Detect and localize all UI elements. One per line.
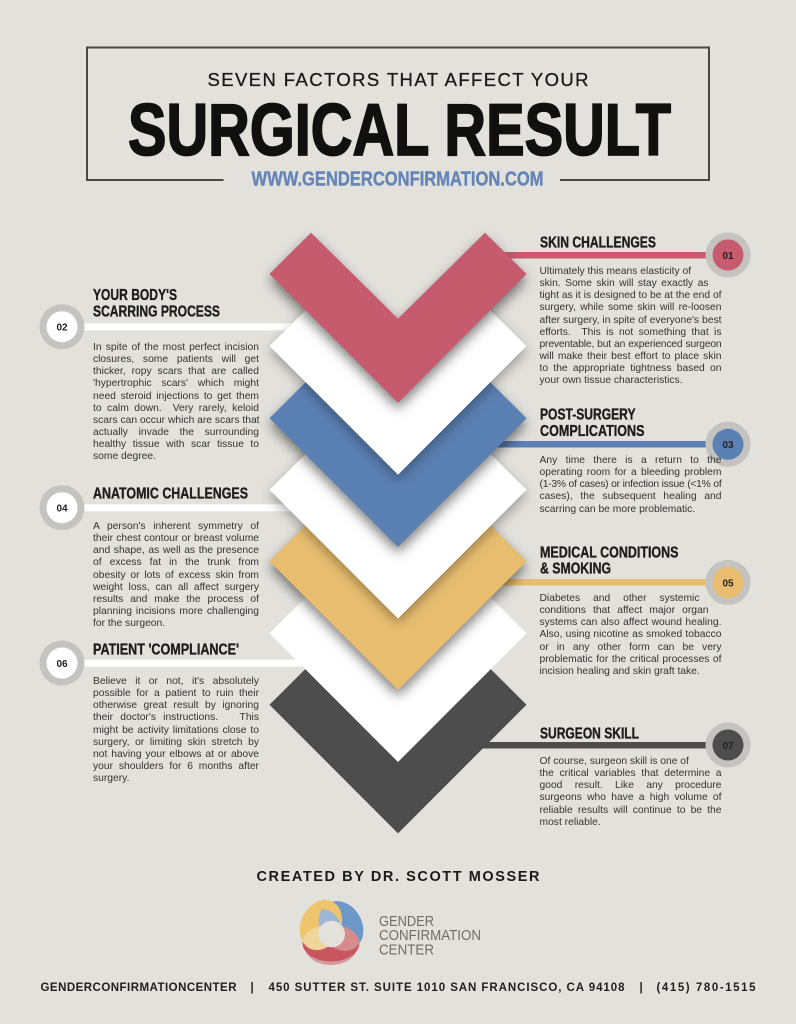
text: your body's scarring process: In spite of the most perfect incision [93, 342, 259, 353]
text: anatomic challenges: for the surgeon. [93, 618, 165, 629]
logo wordmark: GENDER [379, 913, 434, 930]
panel: 05 medical conditions and smoking [540, 544, 722, 677]
contact line: | [640, 982, 643, 994]
text: anatomic challenges: obesity or lots of excess skin from [93, 570, 259, 580]
text: anatomic challenges: of excess fat in the trunk from [93, 557, 259, 568]
logo wordmark: CONFIRMATION [379, 927, 481, 944]
title frame [87, 48, 709, 180]
text: surgeon skill: most reliable. [540, 817, 601, 828]
heading: medical conditions and smoking: MEDICAL CONDITIONS [540, 544, 678, 562]
text: skin challenges: will make their best effort to place skin [540, 351, 722, 362]
connector: 02 [62, 323, 302, 330]
heading: your body's scarring process: SCARRING PROCESS [93, 304, 220, 320]
panel: 01 skin challenges [540, 234, 722, 386]
text: patient compliance: your shoulders for 6 months after [93, 761, 259, 772]
text: patient compliance: their doctor's instructions. This [93, 712, 259, 723]
chevron: white 1 [270, 305, 526, 480]
text: patient compliance: might be activity limitations close to [93, 724, 259, 736]
text: skin challenges: surgery, while some skin will re-loosen [540, 302, 722, 313]
panel: 03 post-surgery complications [540, 406, 722, 514]
text: surgeon skill: the critical variables that determine a [540, 768, 722, 779]
text: your body's scarring process: need steroid injections to get them [93, 390, 259, 402]
contact line: 450 SUTTER ST. SUITE 1010 SAN FRANCISCO, CA 94108 [268, 982, 625, 994]
text: patient compliance: surgery. [93, 773, 129, 784]
text: anatomic challenges: results and make the process of [93, 594, 259, 605]
text: surgeon skill [540, 756, 722, 828]
badge: 06: 06 [56, 659, 68, 670]
chevron: white 2 [270, 448, 526, 624]
contact line: | [250, 982, 254, 994]
subtitle: SEVEN FACTORS THAT AFFECT YOUR [208, 69, 588, 90]
heading: anatomic challenges: ANATOMIC CHALLENGES [93, 486, 248, 502]
text: surgeon skill: good result. Like any procedure [540, 780, 722, 791]
badge: 05: 05 [722, 578, 734, 589]
badge: 02 [40, 304, 84, 349]
text: your body's scarring process: closures, some patients will get [93, 354, 259, 365]
website url: WWW.GENDERCONFIRMATION.COM [252, 168, 544, 190]
text: surgeon skill: surgeons who have a high volume of [540, 792, 722, 803]
text: medical conditions and smoking: Diabetes and other systemic [540, 593, 700, 604]
connector: 05 [495, 579, 728, 586]
logo mark [300, 900, 364, 965]
text: post-surgery complications: (1-3% of cases) or infection issue (<1% of [540, 479, 722, 490]
heading: post-surgery complications: POST-SURGERY [540, 406, 636, 424]
text: skin challenges [540, 266, 722, 386]
connector: 04 [62, 504, 302, 511]
heading: skin challenges: SKIN CHALLENGES [540, 234, 656, 252]
footer [40, 869, 756, 994]
connector: 06 [62, 660, 302, 667]
connector: 03 [495, 441, 728, 448]
header: title box [86, 46, 710, 190]
chevron: blue [270, 377, 526, 553]
text: patient compliance: Believe it or not, it's absolutely [93, 676, 259, 687]
text: anatomic challenges [93, 521, 259, 629]
chevron: yellow [270, 520, 526, 696]
heading: surgeon skill: SURGEON SKILL [540, 726, 638, 742]
text: your body's scarring process: to calm down. Very rarely, keloid [93, 403, 259, 414]
heading: post-surgery complications: COMPLICATIONS [540, 423, 644, 440]
badge: 04: 04 [56, 504, 68, 514]
panel: 06 patient compliance [93, 642, 259, 784]
main title: SURGICAL RESULT [128, 90, 671, 171]
panel: 04 anatomic challenges [93, 486, 259, 629]
text: patient compliance: possible for a patient to ruin their [93, 688, 259, 699]
chevron: white 3 [270, 592, 526, 762]
text: skin challenges: after surgery, in spite of everyone's best [540, 314, 722, 326]
text: medical conditions and smoking: problematic for the critical processes of [540, 654, 722, 665]
text: medical conditions and smoking: systems can also affect wound healing. [540, 617, 722, 628]
logo wordmark [379, 913, 481, 958]
heading: patient compliance: PATIENT 'COMPLIANCE' [93, 642, 239, 658]
text: anatomic challenges: their chest contour or breast volume [93, 533, 259, 544]
heading: medical conditions and smoking: & SMOKING [540, 561, 610, 578]
text: surgeon skill: Of course, surgeon skill is one of [540, 756, 689, 767]
text: medical conditions and smoking [540, 593, 722, 677]
heading: medical conditions and smoking [540, 544, 678, 578]
panel: 07 surgeon skill [540, 726, 722, 828]
text: skin challenges: efforts. This is not something that is [540, 327, 722, 338]
text: skin challenges: to the appropriate tightness based on [540, 363, 722, 374]
connector: 01 [495, 252, 728, 258]
text: skin challenges: preventable, but an experienced surgeon [540, 339, 722, 350]
badge: 07 [706, 722, 750, 768]
heading: post-surgery complications [540, 406, 644, 440]
panel: 02 your body's scarring process [93, 287, 260, 462]
logo wordmark: CENTER [379, 942, 434, 958]
heading: your body's scarring process: YOUR BODY'S [93, 287, 177, 304]
text: medical conditions and smoking: Also, using nicotine as smoked tobacco [540, 629, 722, 640]
text: medical conditions and smoking: conditions that affect major organ [540, 605, 708, 616]
text: skin challenges: tight as it is designed to be at the end of [540, 290, 722, 301]
badge: 01 [706, 232, 750, 278]
text: medical conditions and smoking: or in any other form can be very [540, 642, 722, 652]
text: anatomic challenges: and shape, as well as the presence [93, 545, 259, 556]
text: post-surgery complications [540, 455, 722, 514]
badge: 02: 02 [56, 322, 68, 334]
connector: 07 [470, 742, 728, 748]
badge: 04 [40, 485, 84, 530]
badge: 03: 03 [722, 440, 734, 451]
badge: 07: 07 [722, 741, 734, 752]
text: patient compliance: not having your elbows at or above [93, 749, 259, 760]
text: your body's scarring process: 'hypertrophic scars' which might [93, 378, 259, 389]
contact line: (415) 780-1515 [656, 982, 756, 994]
text: your body's scarring process [93, 342, 260, 462]
text: medical conditions and smoking: incision healing and skin graft take. [540, 666, 700, 677]
text: skin challenges: Ultimately this means elasticity of [540, 266, 691, 277]
heading: your body's scarring process [93, 287, 220, 320]
text: post-surgery complications: cases), the subsequent healing and [540, 491, 722, 502]
badge: 06 [40, 640, 84, 686]
credit line: CREATED BY DR. SCOTT MOSSER [256, 869, 540, 885]
text: patient compliance: otherwise great result by ignoring [93, 700, 259, 711]
text: your body's scarring process: some degree. [93, 451, 156, 462]
text: skin challenges: skin. Some skin will stay exactly as [540, 278, 708, 289]
chevron: red [270, 233, 526, 409]
contact line [40, 982, 756, 994]
contact line: GENDERCONFIRMATIONCENTER [40, 982, 237, 994]
text: patient compliance: surgery, or limiting skin stretch by [93, 737, 259, 748]
badge: 01: 01 [722, 251, 734, 262]
text: anatomic challenges: planning incisions more challenging [93, 606, 259, 617]
text: skin challenges: your own tissue characteristics. [540, 375, 683, 386]
text: post-surgery complications: Any time there is a return to the [540, 455, 722, 466]
text: anatomic challenges: weight loss, can all affect surgery [93, 582, 259, 593]
text: your body's scarring process: actually invade the surrounding [93, 427, 259, 438]
badge: 05 [706, 560, 750, 605]
chevron: dark grey [270, 663, 526, 833]
text: surgeon skill: reliable results will continue to be the [540, 804, 722, 816]
text: anatomic challenges: A person's inherent symmetry of [93, 521, 259, 532]
text: your body's scarring process: healthy tissue with scar tissue to [93, 439, 259, 450]
text: your body's scarring process: scars can occur which are scars that [93, 415, 260, 426]
badge: 03 [706, 422, 750, 467]
text: patient compliance [93, 676, 259, 784]
text: post-surgery complications: operating room for a bleeding problem [540, 467, 722, 478]
text: your body's scarring process: thicker, ropy scars that are called [93, 366, 259, 377]
text: post-surgery complications: scarring can be more problematic. [540, 504, 695, 514]
